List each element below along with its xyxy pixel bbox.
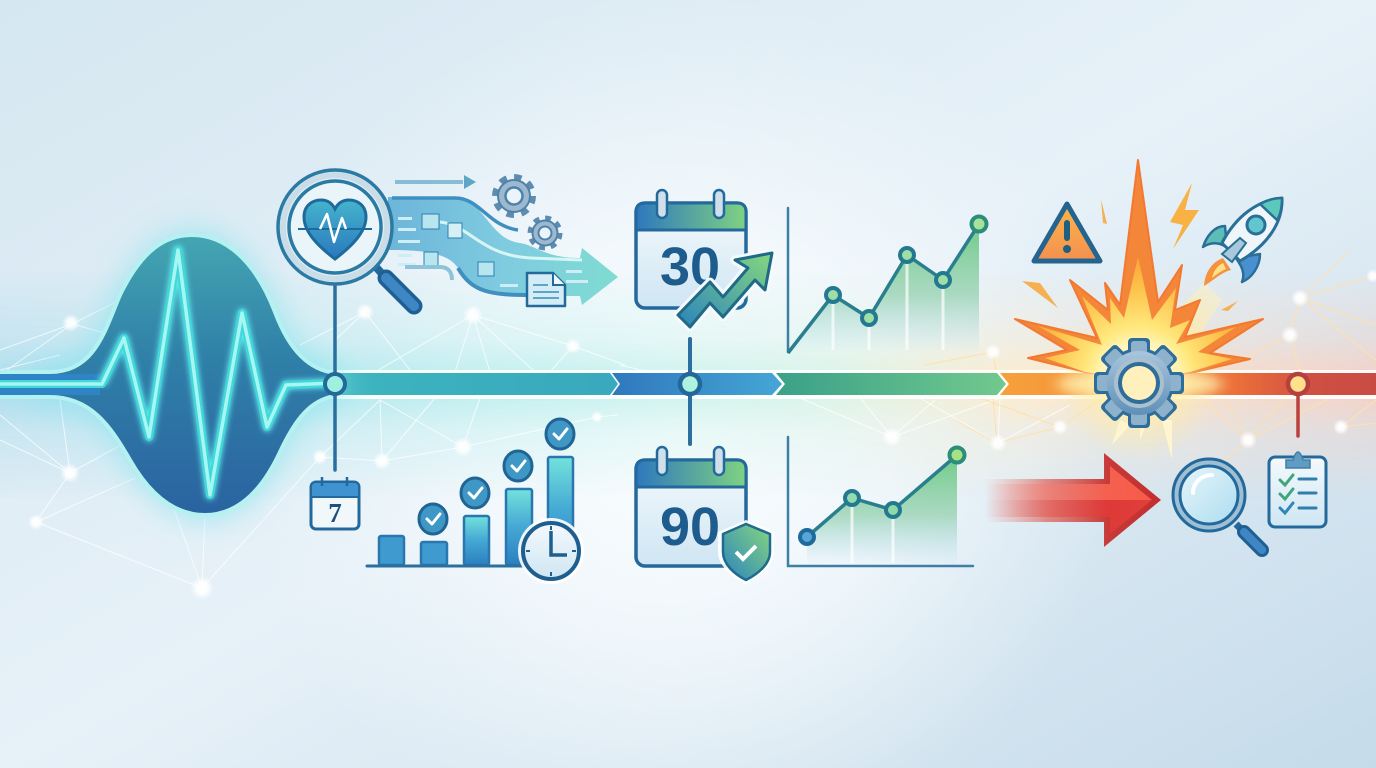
icon: calendar 30 with arrow — [636, 190, 772, 327]
timeline bar — [0, 370, 1376, 399]
flame — [1204, 258, 1231, 286]
calendar header — [636, 203, 746, 230]
gear small — [531, 219, 559, 247]
network mesh — [0, 250, 1376, 600]
line chart: 90 days — [788, 437, 973, 566]
number: 30 — [660, 237, 720, 297]
icon: warning triangle — [1034, 204, 1100, 261]
document — [527, 273, 565, 306]
shield — [718, 520, 774, 584]
burst halo — [1059, 300, 1219, 460]
pulse waveform — [0, 232, 345, 518]
window — [1247, 216, 1265, 234]
icon: calendar 7 — [311, 477, 359, 529]
icon: health magnifier — [278, 170, 414, 306]
connector red — [1288, 374, 1308, 436]
nozzle — [1222, 238, 1246, 262]
icon: calendar 90 with shield — [636, 447, 774, 584]
calendar page — [636, 203, 746, 308]
icon: calendar 90 with shield: 90 — [660, 497, 720, 557]
clock — [518, 518, 584, 584]
segment: orange to red — [1000, 373, 1376, 395]
ECG glow — [102, 250, 335, 495]
arrow upper face — [985, 466, 1152, 500]
burst explosion — [1015, 160, 1263, 460]
bar flash — [1055, 372, 1225, 396]
arrow lower face — [985, 500, 1152, 534]
band shape — [388, 197, 618, 305]
body — [1222, 198, 1282, 261]
icon: magnifier — [1173, 459, 1262, 550]
lower curve — [405, 267, 452, 280]
pulse glow — [30, 232, 345, 518]
connector at day 30/90 — [680, 339, 700, 444]
checks — [1280, 475, 1316, 513]
icon: lightning bolt — [1170, 183, 1199, 249]
segment: blue — [612, 373, 782, 395]
line chart: 30 days — [788, 208, 986, 353]
icon: gear — [1094, 338, 1184, 428]
pulse body — [0, 235, 335, 515]
data chips — [422, 214, 494, 276]
red arrow — [985, 453, 1161, 547]
burst outer — [1015, 160, 1263, 380]
lower rays — [1112, 420, 1172, 460]
rocket trail — [1140, 282, 1222, 380]
bar chart with checks — [367, 419, 584, 584]
up arrow — [678, 253, 772, 327]
burst inner — [1038, 257, 1236, 380]
icon: rocket — [1203, 198, 1282, 286]
axis — [787, 208, 789, 352]
data points — [800, 530, 814, 544]
ECG line — [0, 250, 335, 495]
gear large — [496, 178, 532, 214]
check badges — [419, 419, 574, 534]
arrow outline — [985, 453, 1161, 547]
axes — [788, 437, 973, 566]
segment: left blue — [0, 373, 110, 395]
connector at day 7 — [325, 285, 345, 470]
data points — [826, 248, 950, 325]
heart — [304, 200, 366, 259]
fins — [1203, 226, 1227, 248]
icon: calendar 7: 7 — [328, 498, 342, 528]
segment: green — [776, 373, 1006, 395]
bars — [379, 457, 573, 565]
magnifier handle — [375, 266, 414, 306]
top arrow — [395, 175, 476, 189]
data flow band — [388, 175, 618, 306]
rings — [657, 190, 724, 218]
segment: teal — [0, 373, 618, 395]
icon: checklist clipboard — [1269, 452, 1326, 527]
clip — [1286, 452, 1310, 468]
sparks — [1022, 199, 1238, 311]
baseline — [367, 564, 524, 568]
